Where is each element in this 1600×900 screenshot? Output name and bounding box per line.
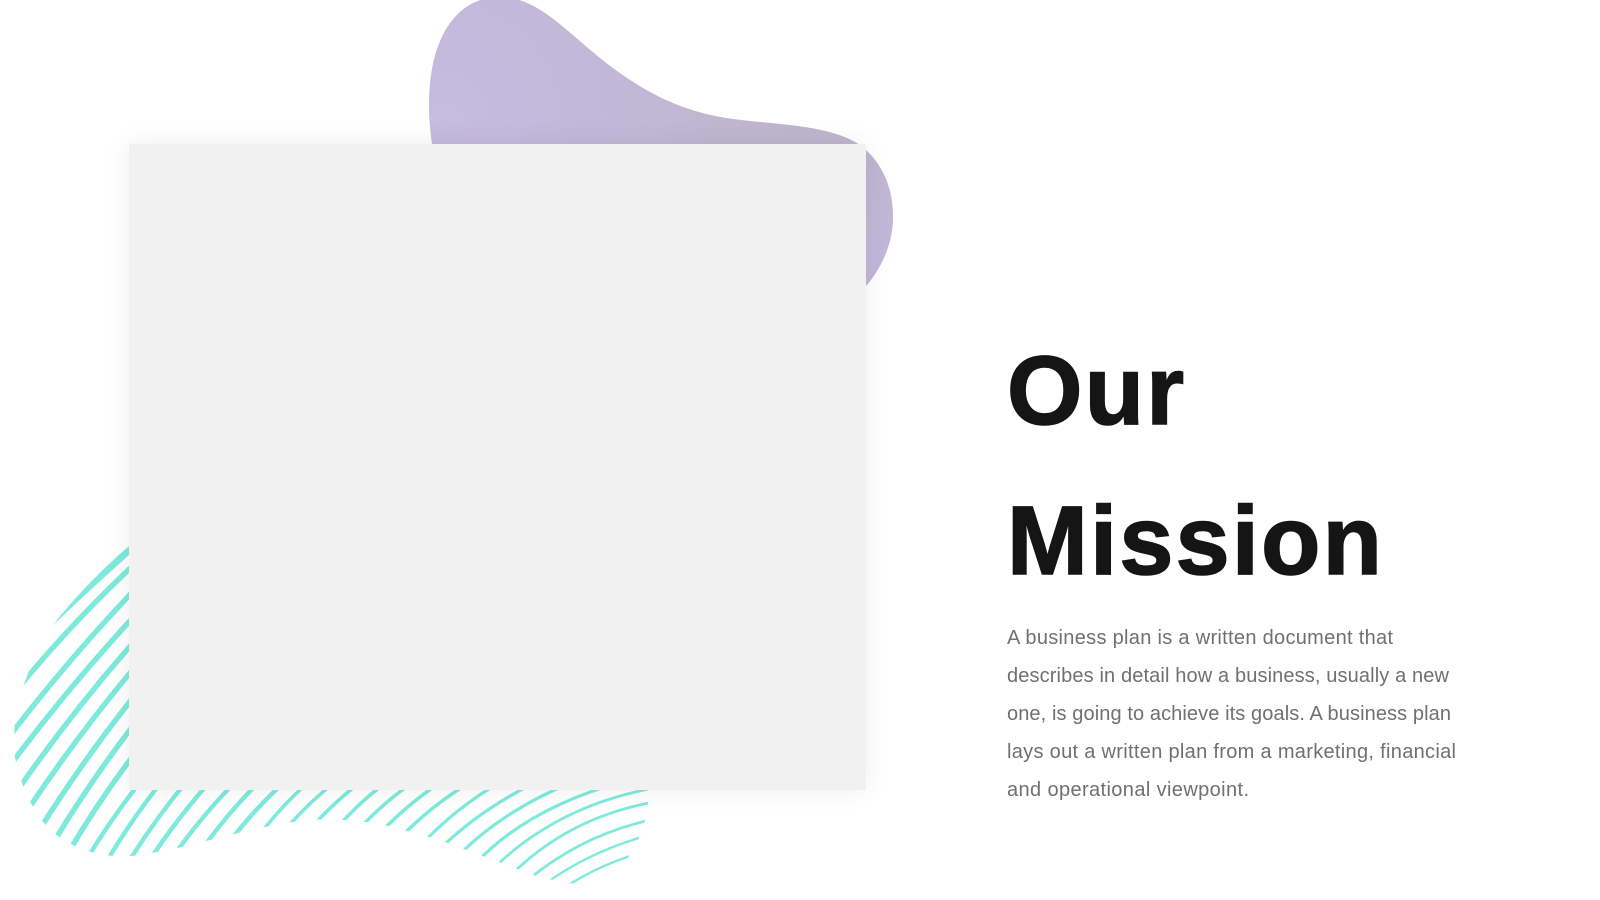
title: Mission — [1007, 486, 1384, 595]
title — [1007, 336, 1384, 595]
body text — [1007, 627, 1456, 801]
purple blob — [429, 0, 893, 400]
decorative blobs — [14, 0, 893, 884]
body text: lays out a written plan from a marketing, financial — [1007, 741, 1456, 763]
body text: one, is going to achieve its goals. A business plan — [1007, 703, 1451, 725]
title: Our — [1007, 336, 1186, 445]
purple blob right lobe tint — [866, 150, 893, 286]
body text: A business plan is a written document that — [1007, 627, 1393, 649]
body text: describes in detail how a business, usually a new — [1007, 665, 1450, 687]
panel: image placeholder card — [129, 144, 866, 790]
body text: and operational viewpoint. — [1007, 779, 1249, 801]
teal striped blob — [8, 546, 660, 886]
